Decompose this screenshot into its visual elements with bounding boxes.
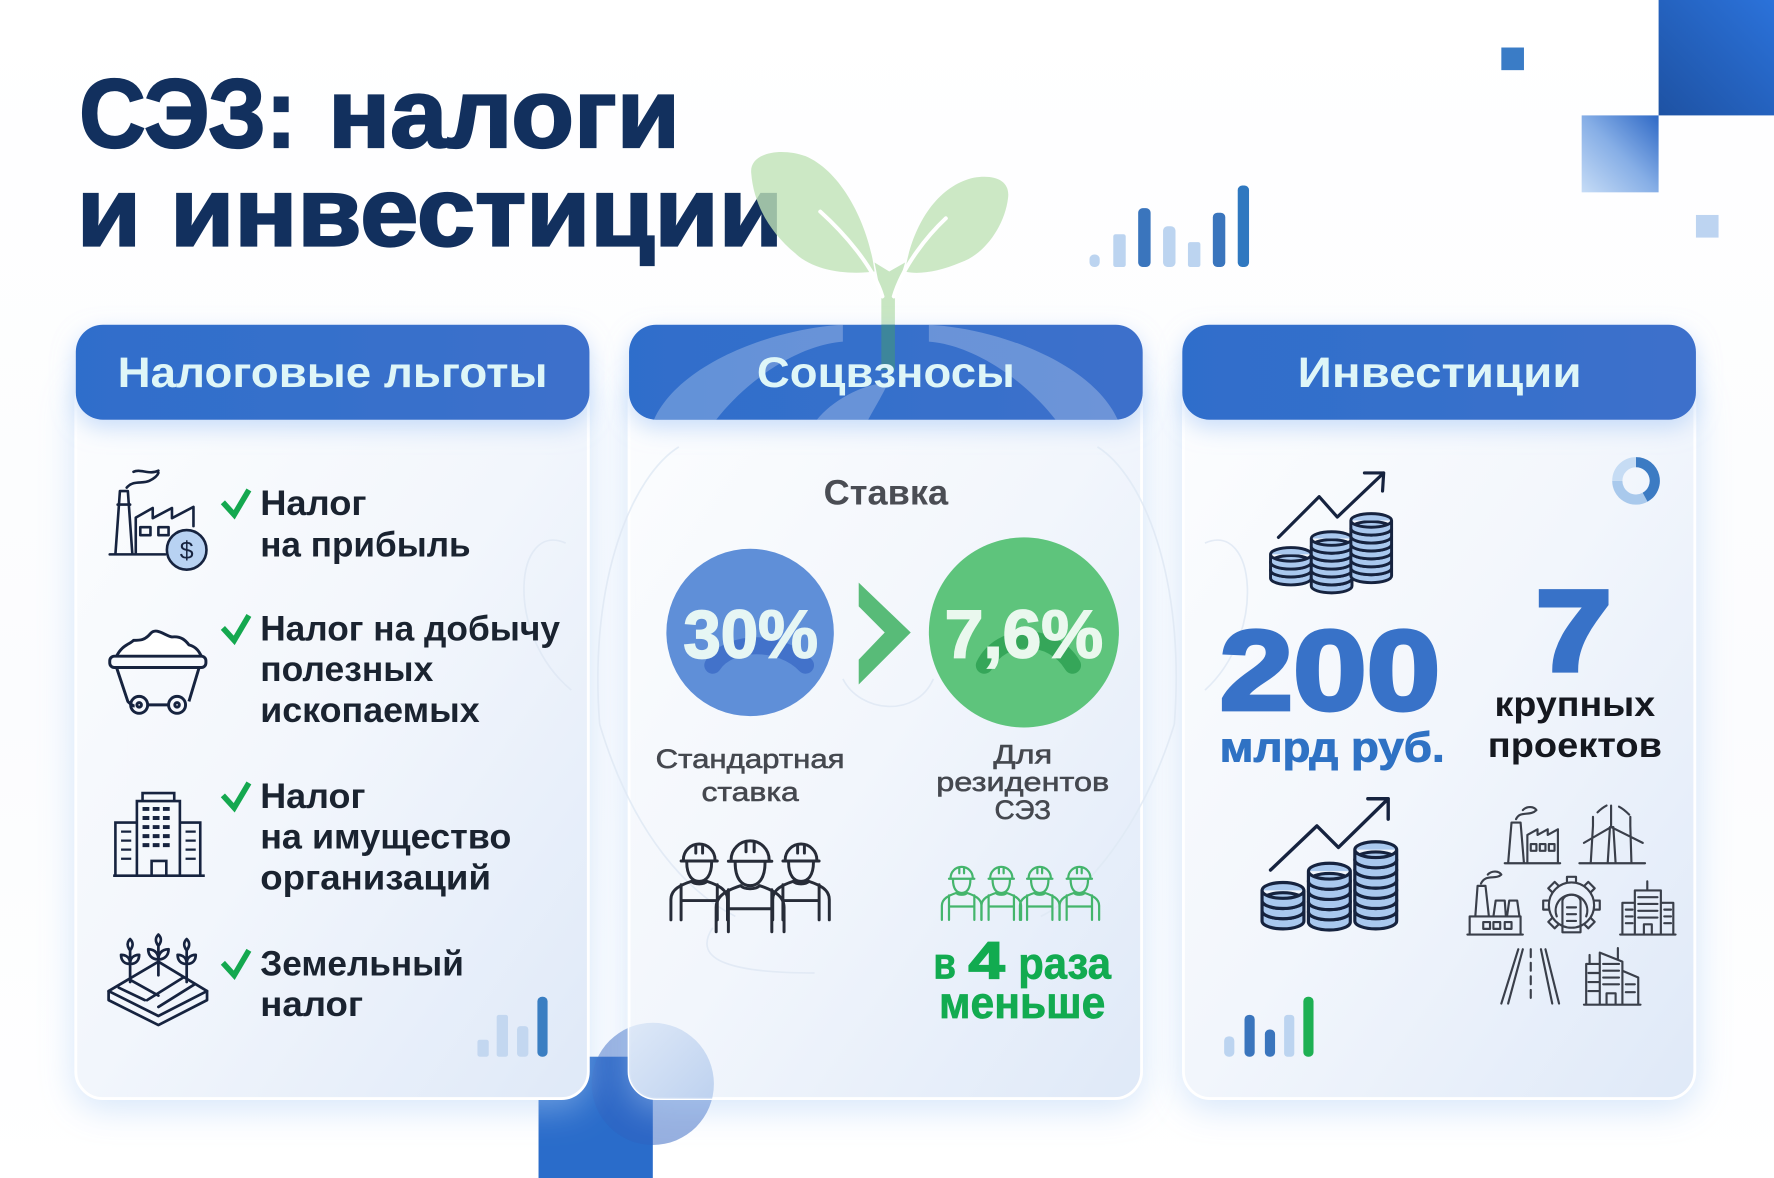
icon: factory with dollar coin: $	[180, 537, 194, 565]
decorative bar chart card 1	[477, 997, 548, 1057]
icon: larger coins with growth arrow	[1262, 799, 1397, 930]
text: 4 times less: в	[933, 940, 956, 989]
title: налоги	[328, 59, 680, 168]
big number 7: 7	[1536, 568, 1611, 694]
title	[77, 59, 783, 267]
header: tax benefits	[76, 325, 589, 420]
text: 4 times less: меньше	[939, 979, 1105, 1028]
text: residents rate: СЭЗ	[994, 794, 1051, 825]
decorative bar chart top	[1090, 186, 1249, 267]
header: contributions	[629, 325, 1143, 436]
green circle 7,6%	[929, 537, 1119, 727]
text: mining tax: Налог на добычу	[260, 609, 561, 648]
text: billion rubles: млрд руб.	[1220, 723, 1445, 770]
check	[223, 950, 249, 975]
text: land tax: Земельный	[260, 944, 464, 983]
title: СЭЗ:	[79, 59, 296, 168]
text: property tax	[260, 777, 511, 897]
decorative squares top right	[1501, 0, 1774, 238]
text: property tax: организаций	[260, 858, 491, 897]
text: standard rate: ставка	[701, 776, 800, 807]
text: residents rate: Для	[993, 739, 1052, 770]
text: standard rate: Стандартная	[656, 743, 845, 774]
icon: road	[1501, 949, 1559, 1004]
panel: investments card	[1183, 373, 1695, 1099]
icon: mining cart	[110, 631, 206, 713]
panel: contributions card	[629, 373, 1142, 1099]
text: standard rate	[656, 743, 845, 807]
decorative bar chart card 3	[1224, 997, 1314, 1057]
icon: power plant	[1467, 872, 1523, 935]
icon: city building	[1620, 881, 1676, 935]
text: mining tax: полезных	[260, 650, 434, 689]
text: profit tax	[260, 484, 471, 565]
icon: donut	[1617, 462, 1655, 500]
big number 200: 200	[1220, 607, 1440, 733]
icon: office towers	[1584, 948, 1640, 1005]
icon: three workers	[671, 841, 829, 932]
text: large projects: проектов	[1488, 726, 1662, 765]
text: 4 times less	[933, 933, 1111, 1028]
check items: tax list	[109, 471, 561, 1025]
green circle 7,6%: 7,6%	[945, 597, 1103, 672]
panel: tax benefits card	[76, 373, 588, 1099]
header: tax benefits: Налоговые льготы	[118, 349, 548, 397]
watermark outlines	[524, 447, 1247, 973]
check	[223, 783, 249, 808]
text: residents rate	[936, 739, 1109, 825]
arrow: chevron	[859, 583, 911, 684]
blue circle 30%	[666, 549, 834, 716]
icon: coins with growth arrow	[1271, 473, 1392, 593]
icon: office building	[113, 793, 205, 876]
text: property tax: Налог	[260, 777, 365, 816]
blue circle 30%: 30%	[683, 597, 818, 672]
text: 4 times less: 4	[968, 933, 1005, 991]
icon: land plot with plants	[109, 935, 207, 1025]
check	[223, 490, 249, 515]
text: residents rate: резидентов	[936, 766, 1109, 797]
header: investments: Инвестиции	[1298, 349, 1582, 397]
text: 4 times less: раза	[1018, 940, 1111, 989]
text: mining tax: ископаемых	[260, 691, 480, 730]
header: contributions: Соцвзносы	[757, 349, 1015, 397]
icon: four green workers	[942, 867, 1099, 920]
text: profit tax: Налог	[260, 484, 367, 523]
header: investments	[1182, 325, 1696, 420]
text: property tax: на имущество	[260, 818, 511, 857]
icons: seven project types	[1467, 806, 1676, 1005]
icon: seedling leaves	[751, 152, 1008, 373]
text: land tax: налог	[260, 985, 363, 1024]
icon: bottom blue square with circle	[539, 1023, 714, 1178]
icon: factory	[1505, 807, 1560, 863]
icon: wind turbines	[1579, 806, 1645, 863]
text: land tax	[260, 944, 464, 1024]
title: и инвестиции	[77, 158, 783, 267]
text: mining tax	[260, 609, 561, 730]
text: large projects	[1488, 685, 1662, 765]
circle showing through card	[629, 1022, 714, 1099]
text: rate label: Ставка	[824, 474, 949, 513]
text: large projects: крупных	[1495, 685, 1656, 724]
text: profit tax: на прибыль	[260, 526, 471, 565]
check	[223, 615, 249, 640]
icon: factory with dollar coin	[110, 471, 206, 570]
icon: gear with tower	[1543, 877, 1600, 932]
